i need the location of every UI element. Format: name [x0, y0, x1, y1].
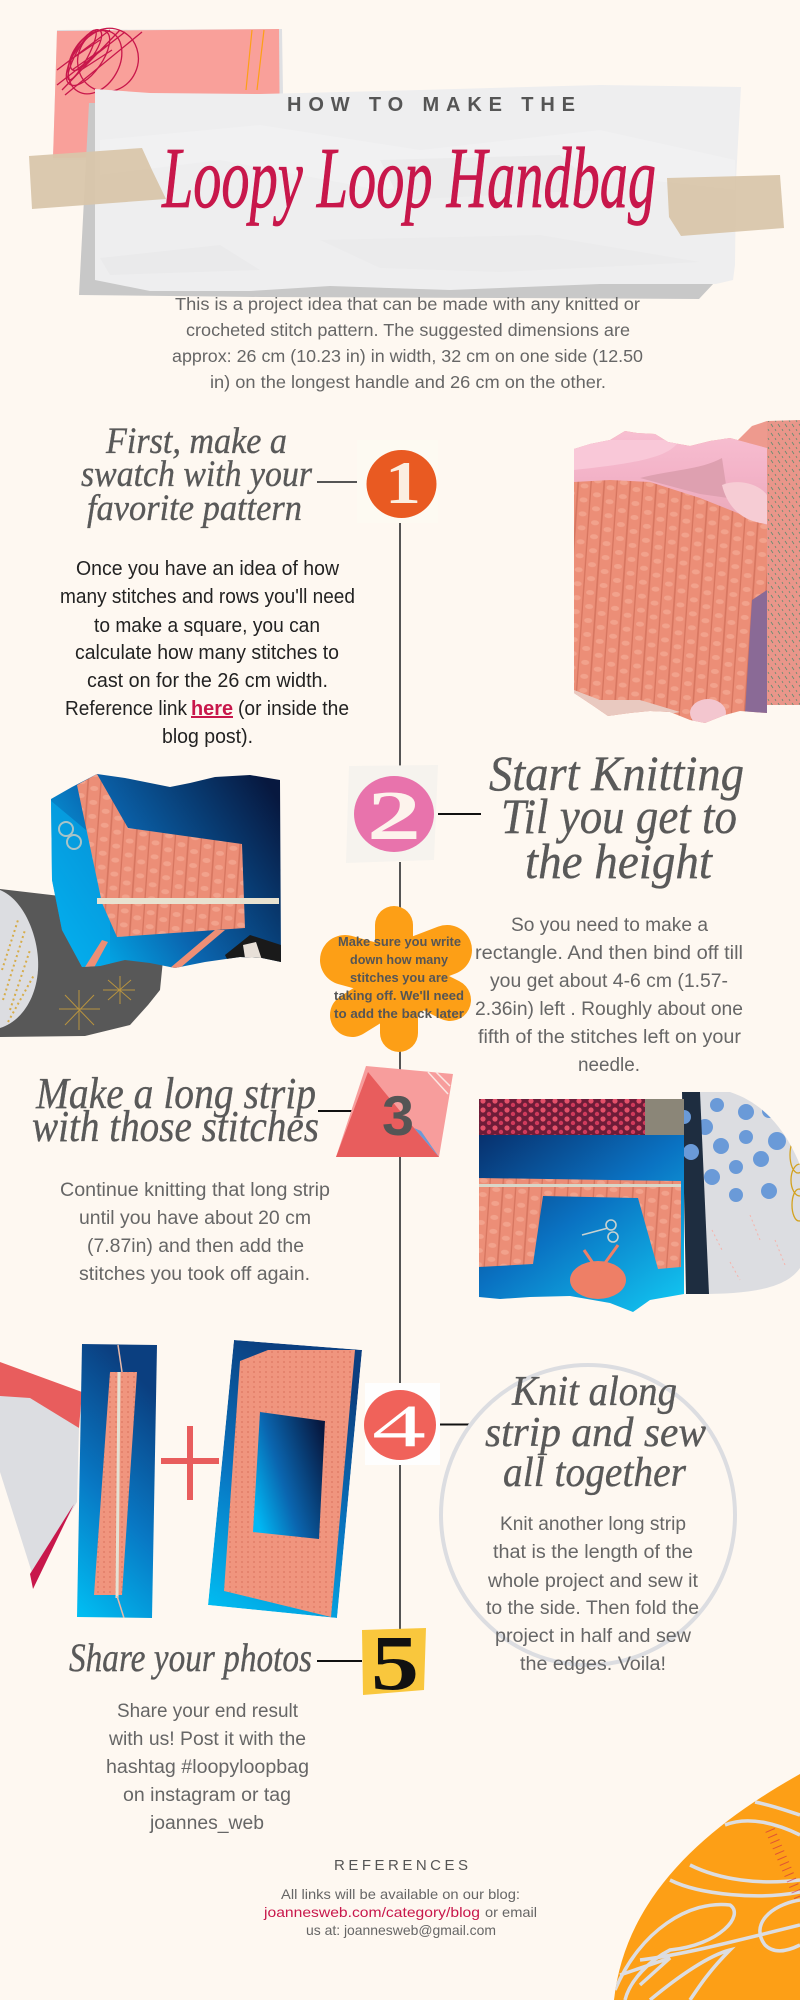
badge 1: [357, 440, 438, 523]
step 1 text: Once you have an idea of how: [76, 558, 340, 580]
step 2 text: fifth of the stitches left on your: [478, 1027, 742, 1048]
step 3 heading: Make a long strip: [35, 1069, 316, 1118]
step 1 text: [60, 558, 355, 748]
step 4 text: Knit another long strip: [500, 1514, 686, 1535]
panel: step 3 photo collage: [479, 1092, 800, 1314]
step 5 text: Share your end result: [117, 1701, 299, 1722]
step 2 heading: Til you get to: [501, 788, 737, 844]
step 1 text: blog post).: [162, 726, 253, 748]
step 3 text: Continue knitting that long strip: [60, 1180, 330, 1201]
badge 5: [362, 1619, 426, 1706]
step 2 text: So you need to make a: [511, 915, 708, 936]
timeline: [399, 523, 401, 1630]
connector 2: [438, 813, 481, 815]
panel: step 2 photo collage: [0, 770, 285, 1037]
scribbled circle: [441, 1365, 735, 1665]
step 1 text: calculate how many stitches to: [75, 642, 339, 664]
bag photo: [208, 1340, 362, 1618]
step 2 text: rectangle. And then bind off till: [475, 943, 743, 964]
connector 3: [318, 1110, 352, 1112]
step 5 heading: Share your photos: [69, 1635, 312, 1680]
step 3 heading: with those stitches: [32, 1102, 319, 1151]
references text: joannesweb.com/category/blog: [263, 1904, 480, 1920]
tape left: [29, 148, 166, 209]
torn white paper: [95, 85, 741, 291]
orange scribbled blob: [600, 1770, 800, 2000]
step 2 text: [475, 915, 743, 1076]
connector 5: [317, 1660, 362, 1662]
step 1 text: (or inside the: [238, 698, 349, 720]
step 5 text: with us! Post it with the: [108, 1729, 306, 1750]
step 1 heading: First, make a: [105, 421, 287, 462]
step 4 heading: [485, 1369, 706, 1496]
step 2 text: 2.36in) left . Roughly about one: [475, 999, 743, 1020]
knitting photo: [50, 770, 285, 975]
step 1 text: many stitches and rows you'll need: [60, 586, 355, 608]
plus sign: [161, 1426, 219, 1500]
references text: [263, 1886, 537, 1938]
step 5 text: on instagram or tag: [123, 1785, 291, 1806]
badge 5: 5: [371, 1619, 419, 1706]
step 3 heading: [32, 1069, 319, 1151]
intro text: in) on the longest handle and 26 cm on the other.: [210, 372, 606, 392]
step 2 text: you get about 4-6 cm (1.57-: [490, 971, 728, 992]
red and gray shard: [0, 1362, 82, 1589]
heading: how to make the: HOW TO MAKE THE: [287, 94, 575, 116]
step 3 text: stitches you took off again.: [79, 1264, 310, 1285]
badge 2: [346, 765, 438, 863]
step 5 text: [106, 1701, 309, 1834]
callout: orange flower: [334, 925, 464, 1033]
references heading: REFERENCES: [334, 1857, 468, 1874]
panel: step 4 photos: [0, 1340, 362, 1620]
step 2 text: needle.: [578, 1055, 640, 1076]
step 1 heading: [81, 421, 313, 529]
header collage: [29, 18, 784, 299]
callout: orange flower: down how many: [350, 952, 449, 967]
knit swatch: [574, 425, 767, 727]
intro text: [172, 294, 643, 392]
step 4 text: to the side. Then fold the: [486, 1598, 699, 1619]
dark blob with stars: [0, 889, 163, 1037]
tape right: [667, 175, 784, 236]
step 5 text: hashtag #loopyloopbag: [106, 1757, 309, 1778]
step 2 heading: the height: [525, 833, 713, 889]
badge 3: [336, 1066, 453, 1157]
step 4 text: project in half and sew: [495, 1626, 691, 1647]
step 1 heading: favorite pattern: [87, 488, 302, 529]
panel: swatch photo: [574, 420, 800, 727]
references text: or email: [485, 1904, 537, 1920]
connector 4: [440, 1424, 469, 1426]
references text: us at: joannesweb@gmail.com: [306, 1922, 496, 1938]
references: [263, 1857, 537, 1938]
step 4 heading: strip and sew: [485, 1410, 706, 1456]
step 1 text: Reference link: [65, 698, 188, 720]
connector 1: [317, 481, 358, 483]
badge 1: 1: [385, 450, 421, 516]
step 4 text: the edges. Voila!: [520, 1654, 666, 1675]
polka dot paper: [677, 1092, 800, 1294]
step 3 text: [60, 1180, 330, 1285]
step 4 text: that is the length of the: [493, 1542, 693, 1563]
callout: orange flower: to add the back later: [334, 1006, 464, 1021]
step 1 heading: swatch with your: [81, 454, 313, 495]
step 4 heading: all together: [503, 1450, 687, 1496]
intro text: This is a project idea that can be made with any knitted or: [175, 294, 640, 314]
step 4 heading: Knit along: [511, 1369, 677, 1415]
step 4 text: whole project and sew it: [487, 1571, 699, 1592]
step 3 text: until you have about 20 cm: [79, 1208, 311, 1229]
strip photo: [75, 1340, 160, 1620]
callout: orange flower: stitches you are: [350, 970, 448, 985]
callout: orange flower: taking off. We'll need: [334, 988, 464, 1003]
badge 2: 2: [367, 778, 421, 855]
flat knitting photo: [479, 1099, 684, 1314]
step 3 text: (7.87in) and then add the: [87, 1236, 304, 1257]
badge 4: 4: [372, 1393, 426, 1459]
pink paper with scribble: [53, 18, 284, 160]
speckled paper: [730, 420, 800, 705]
callout: orange flower: Make sure you write: [338, 934, 461, 949]
step 2 heading: Start Knitting: [489, 745, 744, 801]
step 1 text: to make a square, you can: [94, 615, 320, 637]
step 1 text: cast on for the 26 cm width.: [87, 670, 328, 692]
step 1 text: here: [191, 698, 233, 720]
paper shadow: [79, 103, 714, 299]
badge 3: 3: [382, 1084, 414, 1147]
step 4 text: [486, 1514, 699, 1675]
step 5 text: joannes_web: [149, 1813, 264, 1834]
references text: All links will be available on our blog:: [281, 1886, 520, 1902]
intro text: approx: 26 cm (10.23 in) in width, 32 cm on one side (12.50: [172, 346, 643, 366]
badge 4: [364, 1383, 440, 1465]
intro text: crocheted stitch pattern. The suggested dimensions are: [186, 320, 630, 340]
step 2 heading: [489, 745, 744, 889]
